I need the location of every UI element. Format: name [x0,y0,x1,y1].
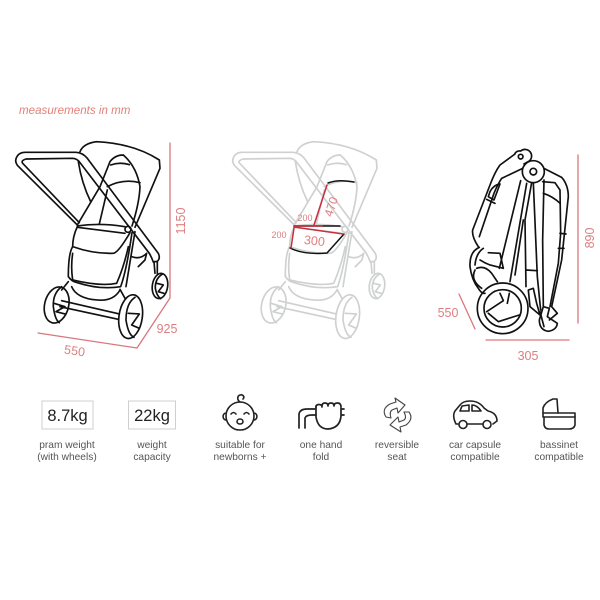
dimension: depth: 925 [157,322,177,336]
weight value: 8.7kg [47,407,88,425]
faded stroller [233,142,386,340]
title: measurements in mm [19,104,131,117]
red measure lines [291,185,343,248]
diagram: seat dimensions [233,142,386,340]
caption: suitable for [215,440,266,451]
dimension: depth: 550 [438,306,458,320]
diagram: stroller full dimensions [16,142,188,359]
caption: weight [136,440,167,451]
black outline highlights [290,181,354,253]
icon: bassinet [543,399,575,429]
caption: compatible [450,452,500,463]
caption: reversible [375,440,419,451]
icon: car [454,401,497,428]
caption: fold [313,452,330,463]
dimension: height: 1150 [174,208,188,234]
dimension: width: 305 [518,349,538,363]
feature: bassinet [534,399,584,463]
feature: pram weight [37,401,97,463]
feature: newborns [214,395,267,463]
capacity box [128,401,176,429]
dimension lines [38,143,170,348]
folded stroller line drawing [470,149,568,334]
caption: capacity [133,452,172,463]
capacity value: 22kg [134,407,170,425]
caption: bassinet [540,440,578,451]
feature: weight capacity [128,401,176,463]
caption: newborns + [214,452,267,463]
caption: pram weight [39,440,95,451]
feature: one hand fold [299,403,344,463]
feature: reversible seat [375,398,419,463]
caption: seat [387,452,407,463]
icon: baby face [223,395,257,430]
dimension: height: 890 [583,228,597,248]
dimension: width: 550 [63,343,86,359]
dimension lines [459,155,578,340]
backrest width label: 200 [271,230,287,240]
icon: reverse arrows [384,398,411,432]
seat height label: 470 [321,195,341,218]
diagram: folded stroller [438,149,597,363]
caption: (with wheels) [37,452,97,463]
feature: car capsule [449,401,501,463]
seat width label: 300 [303,233,326,249]
seat depth label: 200 [297,213,313,223]
caption: car capsule [449,440,501,451]
stroller line drawing [16,142,169,340]
caption: one hand [300,440,343,451]
weight box [42,401,93,429]
caption: compatible [534,452,584,463]
icon: hand on handle [299,403,344,429]
